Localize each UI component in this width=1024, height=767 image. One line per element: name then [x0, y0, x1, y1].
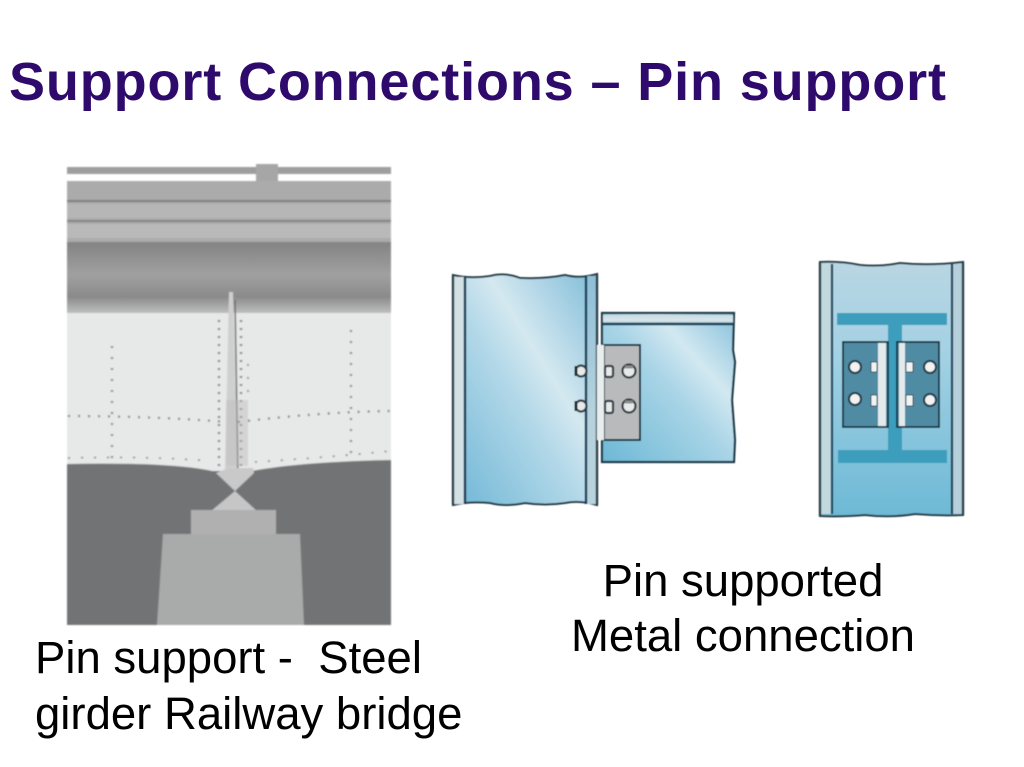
diagram: front view of beam-to-column connection: [820, 262, 963, 516]
pin bearing: [210, 468, 258, 517]
caption: pin supported metal connection: [571, 555, 915, 661]
caption: pin support steel girder railway bridge: girder Railway bridge: [35, 688, 462, 739]
caption: pin support steel girder railway bridge: Pin support - Steel: [35, 632, 422, 683]
caption: pin supported metal connection: Metal connection: [571, 610, 915, 661]
top rail of bridge: [67, 164, 391, 182]
beam section (I shape): [837, 313, 947, 463]
title: Support Connections – Pin support: [9, 52, 946, 112]
girder web plate: [67, 313, 391, 471]
bolts: [576, 364, 636, 413]
connection angle: [597, 345, 640, 440]
right connection plate: [897, 342, 939, 427]
photo: steel girder railway bridge on pin support: [67, 164, 391, 625]
rivet lines: [68, 320, 391, 466]
caption: pin supported metal connection: Pin supported: [603, 555, 883, 606]
diagram: side view of beam-to-column connection: [453, 274, 735, 505]
vertical stiffener: [225, 292, 248, 480]
caption: pin support steel girder railway bridge: [35, 632, 462, 739]
concrete pier: [157, 534, 304, 625]
beam: [602, 313, 735, 462]
left connection plate: [843, 342, 888, 427]
bolts: [849, 361, 936, 406]
column web and flanges: [820, 262, 963, 516]
column: [453, 274, 597, 505]
bearing plinth: [191, 510, 276, 543]
upper girder flange bands: [67, 181, 391, 315]
